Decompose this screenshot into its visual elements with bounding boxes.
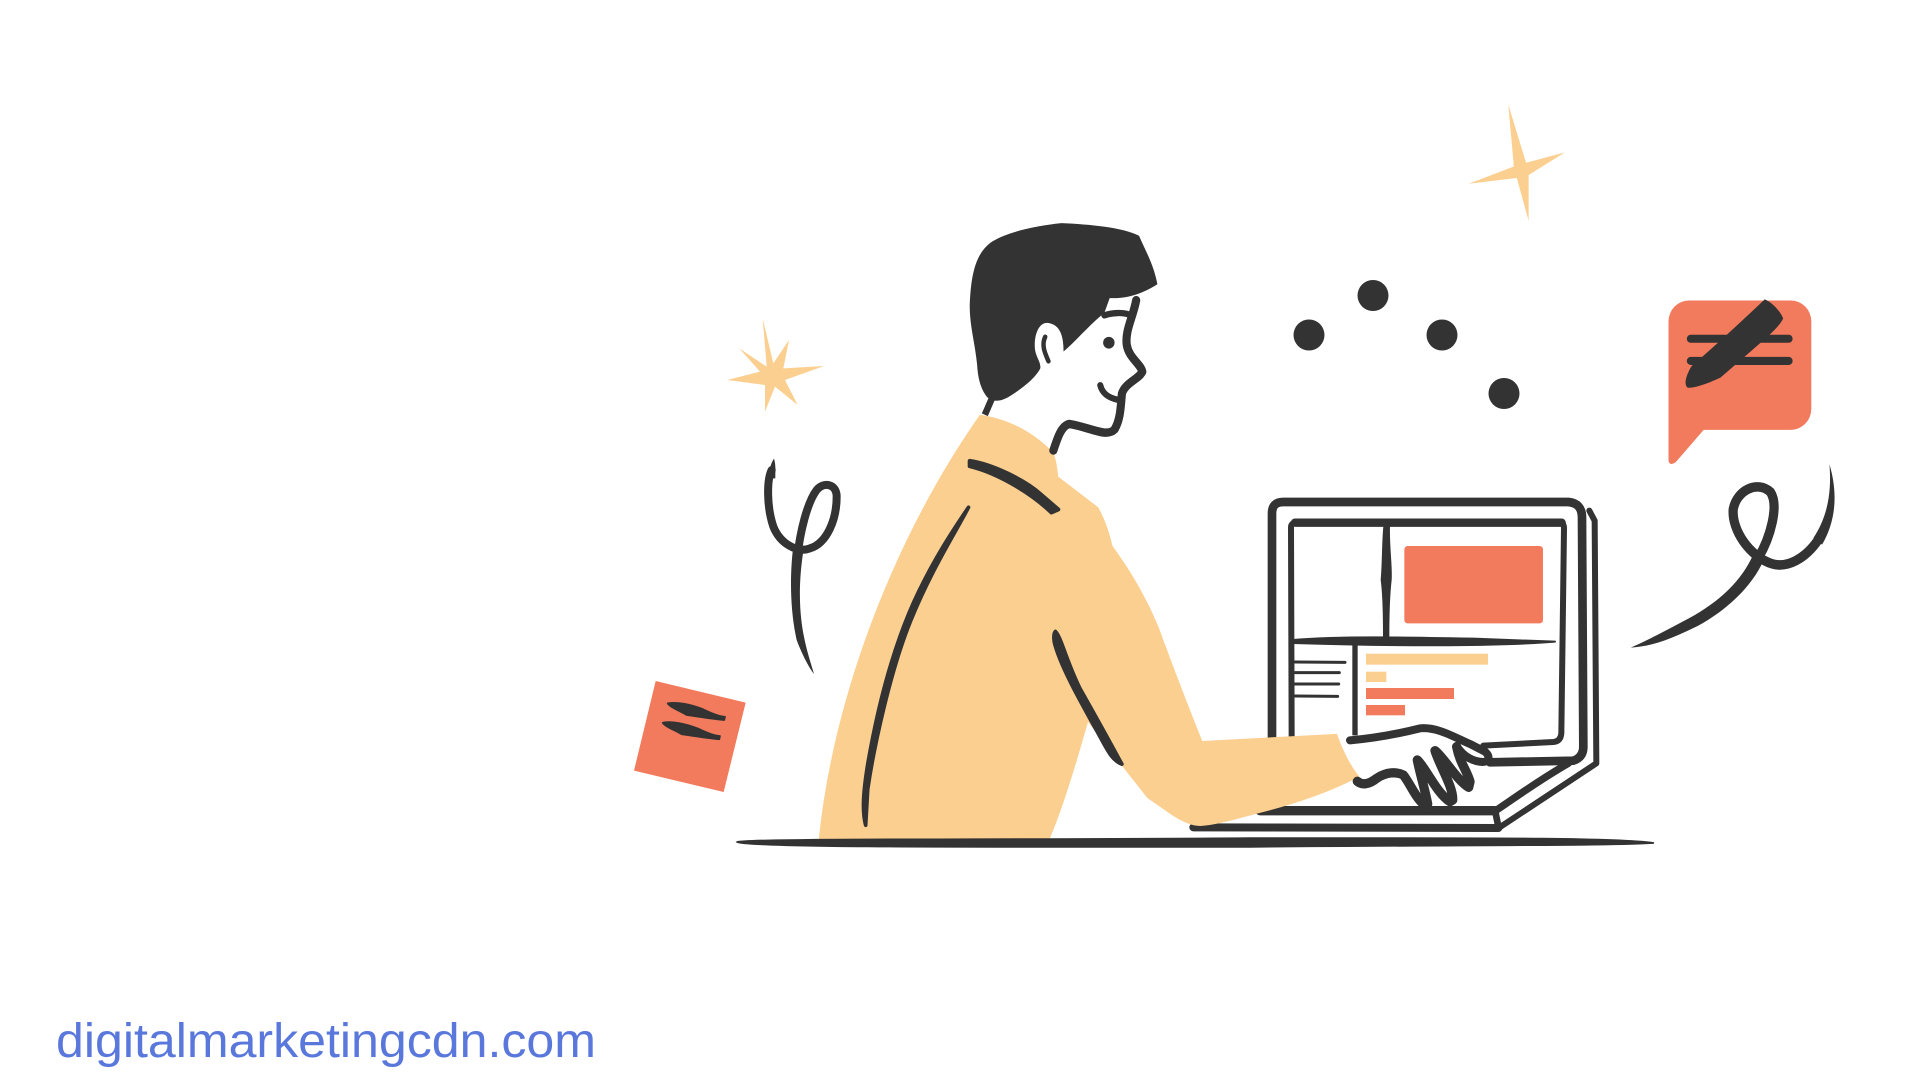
sidebar text lines (1295, 662, 1345, 696)
eye (1103, 337, 1115, 349)
sticky note (634, 681, 746, 792)
face outline (1053, 300, 1142, 450)
curl loop (1733, 487, 1818, 565)
back line (863, 507, 968, 825)
squiggle tail (791, 552, 814, 674)
sparkle (1469, 105, 1565, 221)
pencil (1686, 299, 1783, 388)
table line (737, 838, 1654, 847)
vertical screen divider (1382, 527, 1391, 637)
bubble lines (1691, 339, 1789, 361)
left decorations (634, 318, 837, 792)
curl tail (1631, 553, 1764, 648)
collar line (970, 461, 1058, 512)
laptop (1193, 502, 1596, 828)
hand (1340, 728, 1489, 805)
screen bars (1366, 654, 1488, 665)
eyebrow (1104, 313, 1129, 315)
person (819, 223, 1359, 840)
star (727, 318, 824, 412)
neck line (985, 398, 992, 415)
speech bubble (1668, 300, 1811, 464)
website url: digitalmarketingcdn.com (56, 1015, 596, 1068)
ear detail (1043, 337, 1048, 361)
note line two (663, 722, 720, 739)
hair (970, 223, 1157, 401)
right decorations (1469, 105, 1835, 648)
note line one (668, 703, 725, 720)
thinking dots (1294, 280, 1520, 409)
curl top (1814, 464, 1835, 545)
horizontal screen divider (1293, 637, 1555, 645)
arm line (1054, 632, 1122, 764)
lower divider (1347, 643, 1363, 735)
squiggle (768, 470, 837, 557)
screen image block (1404, 546, 1543, 623)
smile (1100, 385, 1119, 400)
squiggle top (768, 459, 775, 478)
body (819, 415, 1359, 840)
